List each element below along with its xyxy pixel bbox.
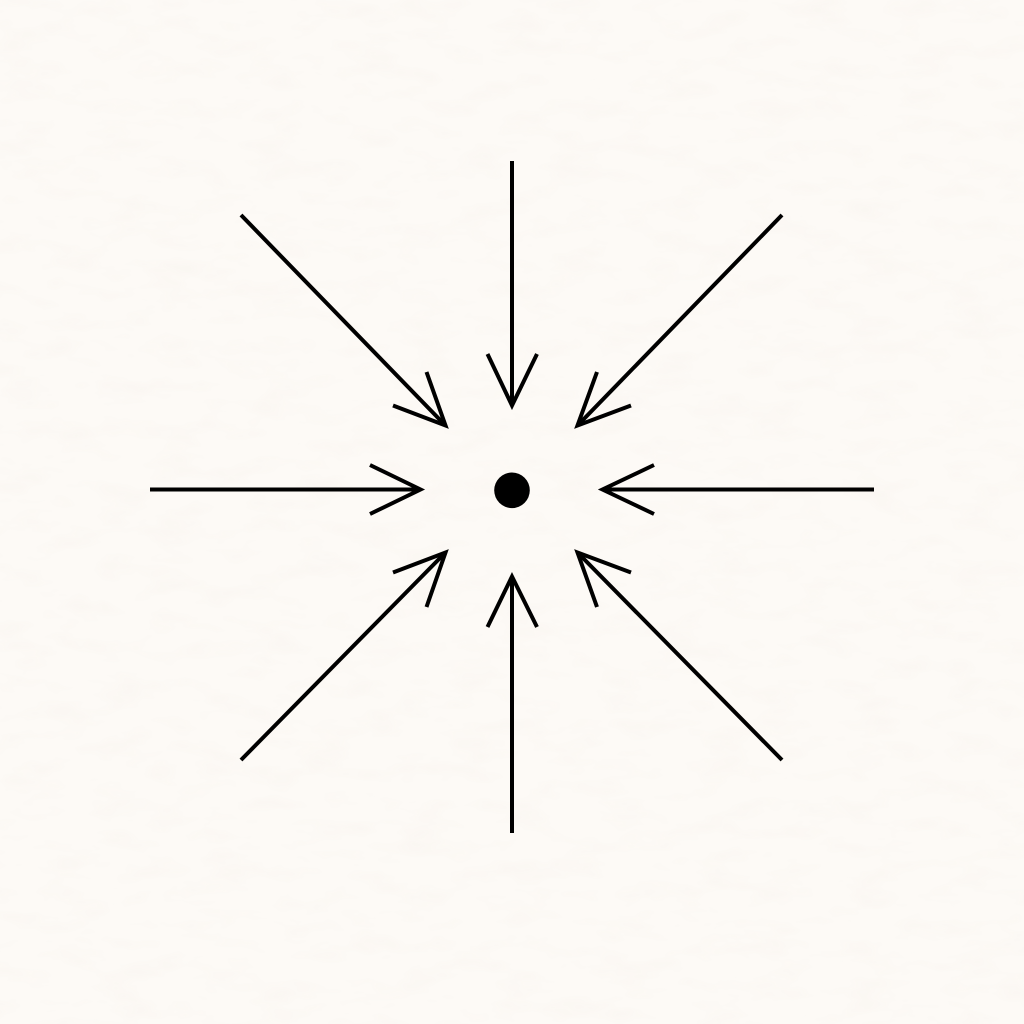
arrow: from bottom right <box>578 552 782 760</box>
arrow: from right <box>602 465 874 514</box>
arrow: from bottom left <box>241 552 446 760</box>
arrows <box>150 161 874 833</box>
arrow: from left <box>150 465 420 514</box>
arrow: from top right <box>578 215 782 426</box>
arrow: from bottom <box>488 576 537 833</box>
arrow: from top left <box>241 215 446 426</box>
center dot <box>494 472 530 508</box>
arrow: from top <box>488 161 537 406</box>
